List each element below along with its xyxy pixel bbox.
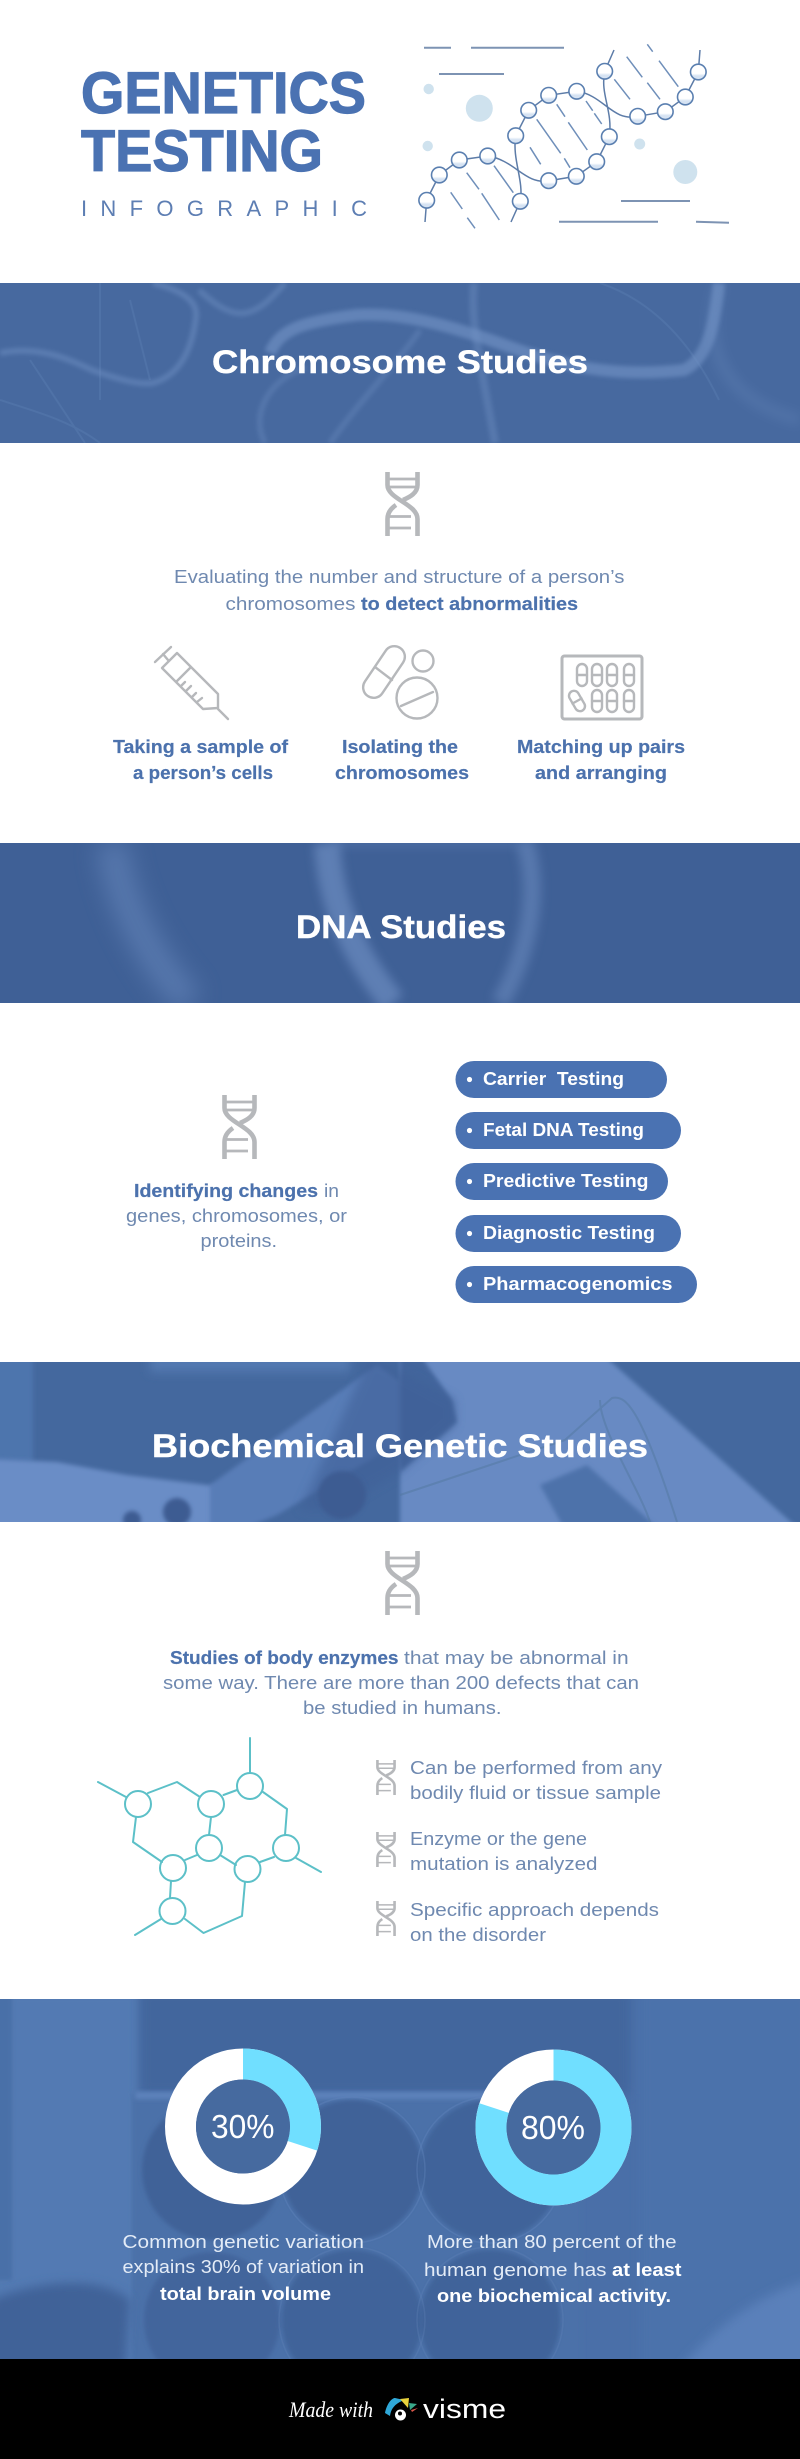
caption: brain volume: [122, 2231, 364, 2304]
text: DNA description: in: [324, 1180, 339, 1201]
icon: DNA: [388, 472, 418, 536]
bullet icon: DNA: [377, 1901, 395, 1936]
pill: Fetal DNA Testing: [456, 1112, 681, 1149]
footer bar: [0, 2359, 800, 2459]
text: biochemical description: be studied in humans.: [303, 1697, 502, 1718]
text: biochemical description: Studies of body enzymes: [170, 1647, 398, 1668]
pill: Diagnostic Testing: Diagnostic Testing: [483, 1222, 655, 1243]
caption: brain volume: explains 30% of variation in: [122, 2256, 364, 2277]
bullet text: approach: on the disorder: [410, 1924, 546, 1945]
icon: DNA: [388, 1551, 418, 1615]
icon: pills: [359, 642, 438, 718]
pill: Carrier Testing: Carrier Testing: [483, 1068, 624, 1089]
chart: donut 80%: [491, 2065, 616, 2190]
panel: Chromosome Studies banner: [0, 283, 800, 443]
bullet icon: DNA: [377, 1832, 395, 1867]
panel: DNA Studies banner: [0, 843, 800, 1003]
text: chromosome description: chromosomes: [226, 593, 356, 614]
label: matching: [517, 736, 685, 783]
label: matching: Matching up pairs: [517, 736, 685, 757]
heading: DNA Studies: DNA Studies: [296, 909, 506, 945]
label: taking a sample: [113, 736, 289, 783]
label: isolating: Isolating the: [342, 736, 458, 757]
text: biochemical description: some way. There are more than 200 defects that can: [163, 1672, 639, 1693]
bullet text: enzyme or gene: Enzyme or the gene: [410, 1828, 587, 1849]
text: DNA description: proteins.: [200, 1230, 277, 1251]
text: chromosome description: to detect abnormalities: [361, 593, 578, 614]
caption: biochemical activity: More than 80 percent of the: [427, 2231, 676, 2252]
icon: DNA: [224, 1095, 254, 1159]
caption: brain volume: total brain volume: [160, 2283, 331, 2304]
pill: Pharmacogenomics: Pharmacogenomics: [483, 1273, 672, 1294]
title block: [81, 61, 367, 221]
text: biochemical description: [163, 1647, 639, 1718]
footer text: made with: Made with: [288, 2397, 373, 2422]
bullet text: approach: [410, 1899, 659, 1945]
label: isolating: chromosomes: [335, 762, 469, 783]
caption: biochemical activity: one biochemical activity.: [437, 2285, 671, 2306]
caption: biochemical activity: human genome has: [424, 2259, 606, 2280]
chart: donut 80%: 80%: [521, 2109, 585, 2146]
title block: GENETICS: [81, 61, 366, 126]
text: chromosome description: [174, 566, 624, 614]
text: chromosome description: Evaluating the number and structure of a person’s: [174, 566, 624, 587]
title block: INFOGRAPHIC: [81, 196, 367, 221]
illustration: DNA helix: [419, 44, 729, 228]
bullet text: enzyme or gene: [410, 1828, 598, 1874]
text: DNA description: Identifying changes: [134, 1180, 318, 1201]
bullet text: enzyme or gene: mutation is analyzed: [410, 1853, 598, 1874]
bullet text: fluid or tissue: bodily fluid or tissue sample: [410, 1782, 661, 1803]
pill: Pharmacogenomics: [456, 1266, 697, 1303]
heading: Chromosome Studies: Chromosome Studies: [212, 344, 588, 380]
icon: syringe: [155, 647, 228, 719]
bullet text: fluid or tissue: [410, 1757, 663, 1803]
footer wordmark: visme: [423, 2394, 506, 2424]
caption: biochemical activity: at least: [612, 2259, 682, 2280]
label: matching: and arranging: [535, 762, 667, 783]
chart: donut 30%: [180, 2064, 306, 2189]
panel: statistics: [0, 1999, 800, 2359]
pill: Predictive Testing: [456, 1163, 668, 1200]
caption: brain volume: Common genetic variation: [122, 2231, 364, 2252]
bullet icon: DNA: [377, 1760, 395, 1795]
illustration: molecule network: [98, 1738, 321, 1935]
heading: Biochemical Genetic Studies: Biochemical Genetic Studies: [152, 1428, 648, 1464]
title block: TESTING: [81, 119, 323, 184]
footer logo: [385, 2398, 418, 2420]
caption: biochemical activity: [424, 2231, 682, 2306]
label: taking a sample: Taking a sample of: [113, 736, 289, 757]
label: taking a sample: a person’s cells: [133, 762, 273, 783]
pill: Fetal DNA Testing: Fetal DNA Testing: [483, 1119, 644, 1140]
text: DNA description: genes, chromosomes, or: [126, 1205, 347, 1226]
pill: Diagnostic Testing: [456, 1215, 681, 1252]
text: DNA description: [126, 1180, 347, 1251]
text: biochemical description: that may be abnormal in: [404, 1647, 629, 1668]
pill: Predictive Testing: Predictive Testing: [483, 1170, 648, 1191]
bullet text: approach: Specific approach depends: [410, 1899, 659, 1920]
pill: Carrier Testing: [456, 1061, 667, 1098]
icon: blister pack: [562, 656, 642, 719]
chart: donut 30%: 30%: [211, 2108, 274, 2145]
bullet text: fluid or tissue: Can be performed from any: [410, 1757, 663, 1778]
panel: Biochemical Genetic Studies banner: [0, 1362, 800, 1522]
label: isolating: [335, 736, 469, 783]
